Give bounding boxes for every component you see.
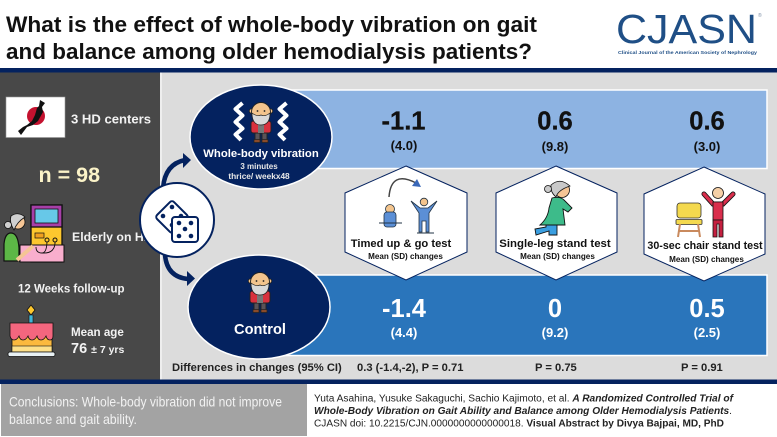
icon: randomisation dice [140, 183, 214, 257]
values: intervention group: 0.6 [537, 108, 573, 136]
icon: chair and standing person [676, 188, 733, 237]
text: 3 HD centers: 3 HD centers [71, 112, 151, 126]
panel: 30-sec chair stand test: 30-sec chair stand test [647, 240, 763, 252]
conclusions box: Conclusions: Whole-body vibration did not improve [9, 394, 282, 410]
panel: timed up and go test [345, 166, 467, 280]
panel: 30-sec chair stand test [644, 167, 765, 281]
title: What is the effect of whole-body vibration on gait [6, 12, 538, 37]
panel: timed up and go test: Timed up & go test [351, 238, 452, 250]
values: intervention group: (3.0) [694, 139, 720, 154]
panel: 30-sec chair stand test: Mean (SD) changes [669, 255, 744, 264]
logo: CJASN: ® [758, 12, 762, 19]
control result band [260, 275, 767, 356]
values: control group: (9.2) [542, 325, 568, 340]
differences in changes row: Differences in changes (95% CI) [172, 362, 342, 374]
conclusions box [1, 384, 307, 436]
values: control group: -1.4 [382, 295, 427, 323]
differences in changes row: P = 0.75 [535, 362, 577, 374]
citation: CJASN doi: 10.2215/CJN.0000000000000018. Visual Abstract by Divya Bajpai, MD, PhD [314, 418, 724, 430]
values: control group: (2.5) [694, 325, 720, 340]
text: mean age: Mean age [71, 326, 124, 339]
text: mean age: 76 ± 7 yrs [71, 341, 125, 357]
panel: control group: Control [234, 322, 286, 338]
title [6, 12, 538, 64]
values: intervention group: (9.8) [542, 139, 568, 154]
icon: woman on one leg [535, 181, 572, 235]
citation: Yuta Asahina, Yusuke Sakaguchi, Sachio Kajimoto, et al. A Randomized Controlled Trial of [314, 394, 735, 404]
values: control group [382, 295, 725, 340]
icon: Japan flag [6, 97, 65, 138]
panel: control group [188, 255, 330, 359]
text: Elderly on HD (clipped by the dice circle): Elderly on HD [72, 230, 153, 244]
header background [0, 0, 777, 68]
arrow: to control [165, 255, 188, 279]
text: sample size: n = 98 [38, 163, 100, 187]
icon: birthday cake [8, 305, 55, 356]
values: control group: 0.5 [689, 295, 725, 323]
values: intervention group: -1.1 [382, 108, 425, 136]
values: intervention group: 0.6 [689, 108, 725, 136]
left dark panel [0, 72, 160, 380]
text: mean age [71, 326, 125, 357]
icon: patient at dialysis machine [4, 205, 64, 262]
panel: timed up and go test: Mean (SD) changes [368, 252, 443, 261]
panel: whole-body vibration group [190, 85, 332, 189]
panel: single-leg stand test: Single-leg stand test [499, 238, 611, 250]
panel: whole-body vibration group: thrice/ weekx48 [228, 171, 290, 181]
differences in changes row: P = 0.91 [681, 362, 723, 374]
differences in changes row [172, 362, 723, 374]
panel: single-leg stand test [496, 166, 617, 280]
logo: CJASN: CJASN [616, 6, 757, 52]
values: control group: 0 [548, 295, 562, 323]
values: intervention group: (4.0) [391, 138, 417, 153]
citation [314, 394, 735, 430]
values: control group: (4.4) [391, 325, 417, 340]
values: intervention group [382, 108, 725, 154]
citation: Whole-Body Vibration on Gait Ability and Balance among Older Hemodialysis Patients . [314, 406, 732, 417]
intervention result band [260, 90, 767, 168]
panel: single-leg stand test: Mean (SD) changes [520, 252, 595, 261]
logo: CJASN: Clinical Journal of the American Society of Nephrology [618, 50, 758, 55]
text: follow-up: 12 Weeks follow-up [18, 284, 125, 296]
arrow: to intervention [163, 160, 185, 188]
differences in changes row: 0.3 (-1.4,-2), P = 0.71 [357, 362, 463, 374]
top and bottom rule [0, 68, 777, 72]
panel: whole-body vibration group: Whole-body vibration [203, 148, 319, 160]
main grey panel [160, 72, 777, 380]
conclusions box: balance and gait ability. [9, 411, 137, 427]
title: and balance among older hemodialysis patients? [6, 39, 532, 64]
panel: whole-body vibration group: 3 minutes [240, 162, 278, 171]
icon: sit-to-stand arrow [379, 179, 437, 233]
